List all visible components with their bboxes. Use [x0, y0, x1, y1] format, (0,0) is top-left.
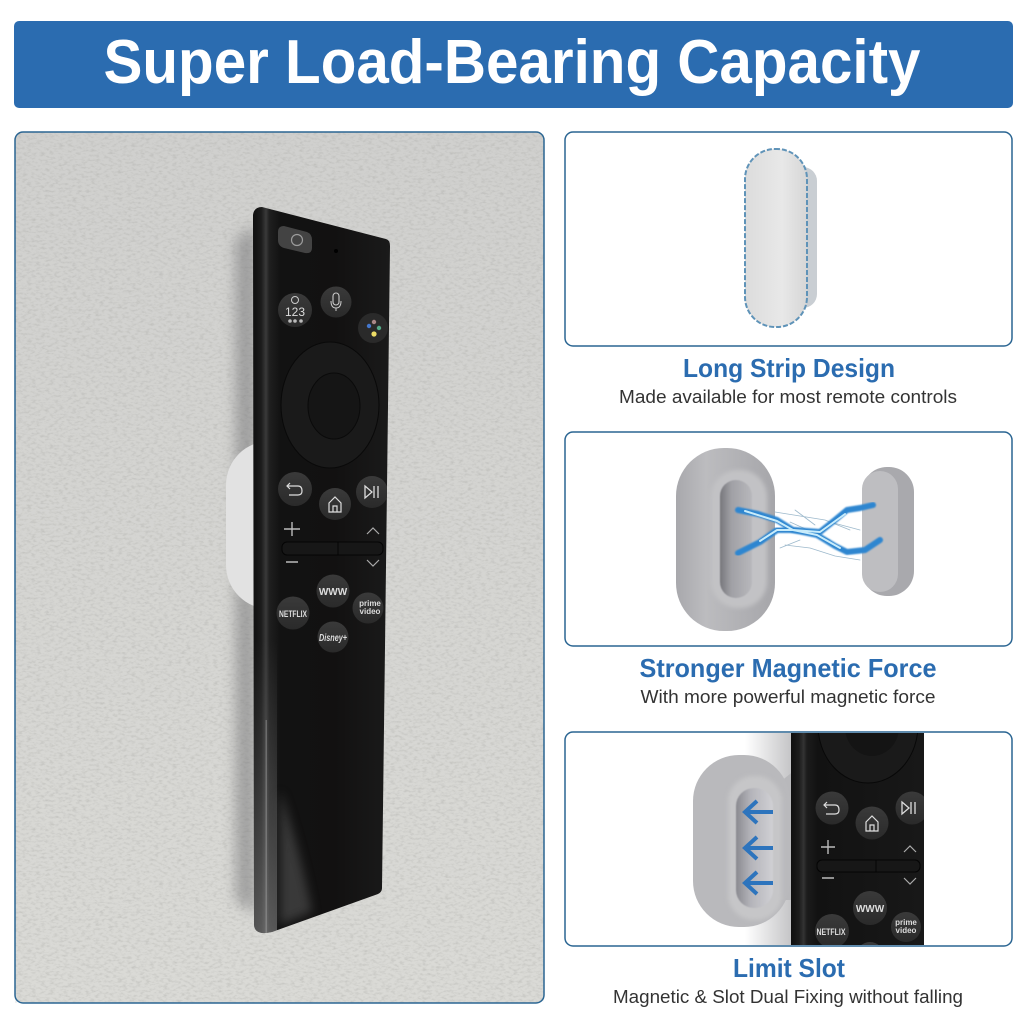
home button: [319, 488, 351, 520]
sensor dot: [334, 249, 338, 253]
panel: limit slot: [564, 731, 1013, 947]
caption: long strip design: Long Strip Design: [683, 353, 895, 383]
prime video button: video: [360, 607, 381, 616]
back button: [816, 792, 848, 824]
blue arrows pointing into slot: [745, 801, 773, 894]
play pause button: [896, 792, 924, 824]
prime video button: [352, 592, 384, 624]
settings 123 button: [278, 293, 312, 327]
netflix button: [815, 914, 849, 948]
title banner: [14, 21, 1013, 108]
caption: long strip design: Made available for most remote controls: [619, 387, 957, 407]
slot mount: [693, 755, 790, 927]
adhesive strip illustration: [745, 149, 817, 327]
prime video button: video: [896, 926, 917, 935]
netflix button: NETFLIX: [279, 609, 307, 620]
caption: limit slot: Limit Slot: [733, 953, 845, 983]
disney button crop: [862, 942, 878, 945]
volume and channel rocker: [282, 522, 383, 566]
power button: [278, 226, 312, 253]
disney plus button: Disney+: [319, 633, 347, 644]
title text: Super Load-Bearing Capacity: [104, 28, 921, 97]
wall mount plate: [226, 441, 316, 609]
www button: [853, 891, 887, 925]
www button: WWW: [856, 904, 885, 915]
caption: stronger magnetic force: Stronger Magnetic Force: [640, 653, 936, 683]
prime video button: [891, 912, 921, 942]
back button: [278, 472, 312, 506]
www button: [316, 574, 350, 608]
settings 123 button: 123: [285, 305, 305, 319]
panel border: [15, 132, 544, 1003]
netflix button: [276, 596, 310, 630]
panel: long strip design: [565, 132, 1012, 346]
lightning between magnets: [738, 505, 880, 560]
netflix button: NETFLIX: [816, 927, 846, 938]
mount behind remote: [784, 774, 791, 900]
panel: remote mounted on wall: [15, 132, 544, 1003]
prime video button: prime: [359, 599, 381, 608]
large magnetic mount: [676, 448, 775, 631]
disney plus button: [318, 622, 348, 652]
caption: stronger magnetic force: With more powerful magnetic force: [640, 687, 936, 707]
navigation wheel crop: [818, 733, 918, 784]
remote close-up: [791, 733, 924, 945]
assistant button: [358, 313, 388, 343]
caption: stronger magnetic force: [640, 653, 936, 707]
panel border: [565, 732, 1012, 946]
caption: limit slot: Magnetic & Slot Dual Fixing without falling: [613, 987, 963, 1007]
home button: [856, 806, 888, 840]
play pause button: [356, 476, 388, 508]
caption: long strip design: [619, 353, 957, 407]
prime video button: prime: [895, 918, 917, 927]
microphone button: [320, 286, 352, 318]
www button: WWW: [319, 587, 348, 598]
caption: limit slot: [613, 953, 963, 1007]
panel: stronger magnetic force: [565, 432, 1012, 646]
navigation wheel: [281, 342, 379, 468]
rocker: [817, 840, 920, 884]
remote control: [250, 205, 392, 937]
small magnetic plate: [862, 467, 914, 596]
